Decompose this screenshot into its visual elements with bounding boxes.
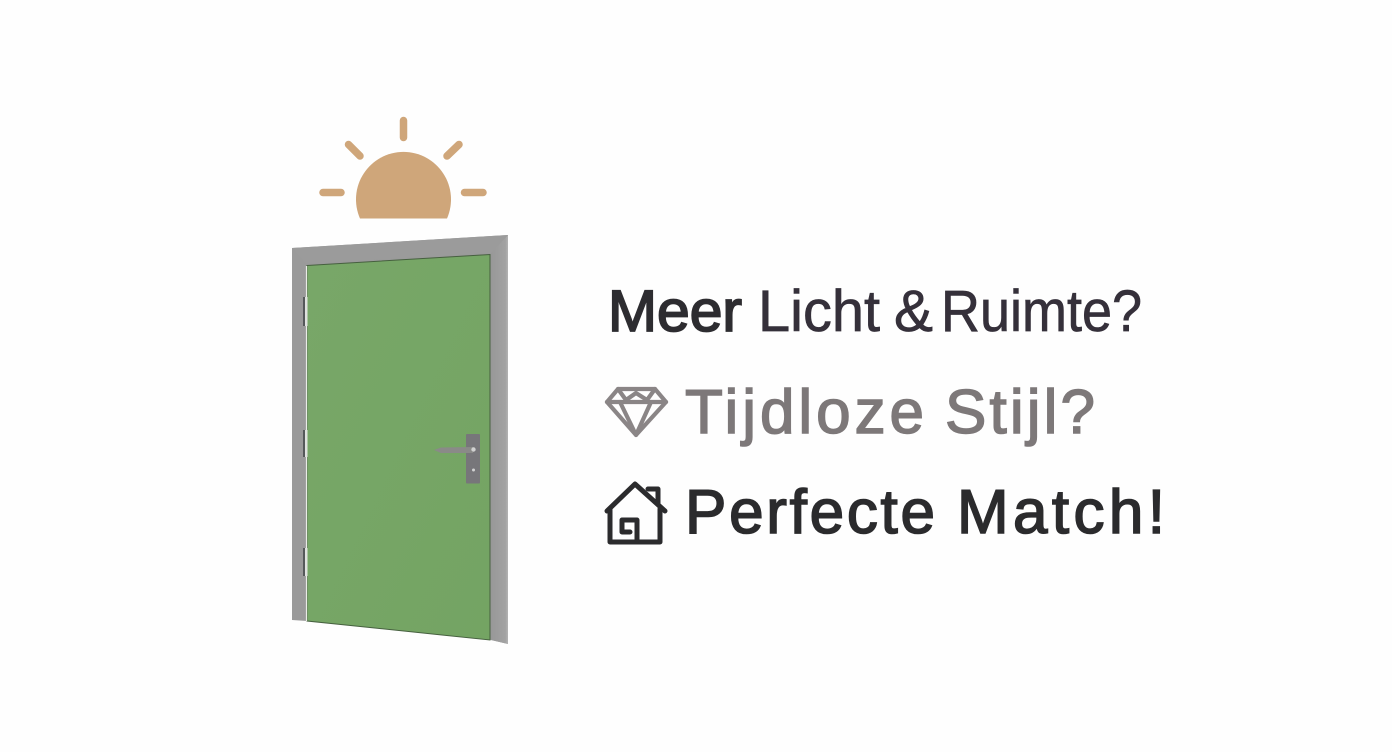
door hinges: [303, 297, 308, 576]
text: Tijdloze Stijl?: Tijdloze: [685, 378, 924, 447]
icon: sun: [323, 120, 483, 218]
icon: house: [607, 484, 665, 542]
heading line 1: Meer Licht & Ruimte?: &: [894, 279, 933, 344]
heading line 1: Meer Licht & Ruimte?: Licht: [758, 279, 880, 344]
heading line 1: Meer Licht & Ruimte?: Meer: [608, 279, 742, 344]
line 3: house icon and Perfecte Match!: [607, 478, 1165, 547]
text: Perfecte Match!: [685, 478, 1165, 547]
text: Perfecte Match!: Perfecte: [685, 478, 935, 547]
line 2: diamond icon and Tijdloze Stijl?: [607, 378, 1095, 447]
door handle: [434, 434, 480, 484]
text: Perfecte Match!: Match!: [957, 478, 1165, 547]
door illustration: [292, 235, 508, 644]
icon: diamond: [607, 389, 666, 435]
text: Tijdloze Stijl?: [685, 378, 1095, 447]
heading line 1: Meer Licht & Ruimte?: [608, 279, 1142, 344]
text: Tijdloze Stijl?: Stijl?: [945, 378, 1095, 447]
door frame: [292, 235, 508, 644]
door leaf: [307, 254, 490, 640]
heading line 1: Meer Licht & Ruimte?: Ruimte?: [941, 279, 1142, 344]
